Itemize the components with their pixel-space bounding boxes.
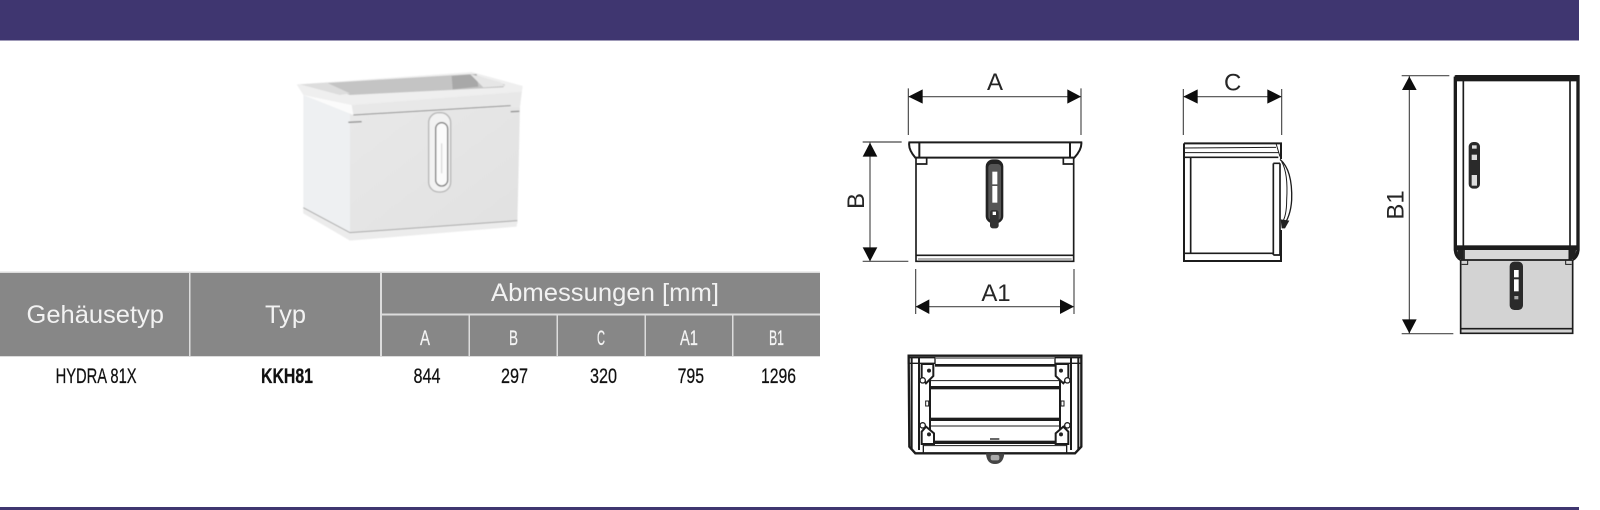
corners and posts — [908, 357, 1082, 453]
table row: HYDRA 81X values: 795 — [678, 365, 704, 388]
table row: HYDRA 81X values: 1296 — [761, 365, 796, 388]
drawing: front view with dimensions A and B — [843, 69, 1081, 261]
dimension A: A — [987, 69, 1003, 96]
product photo: enclosure — [297, 72, 523, 241]
enclosure side outline — [1184, 143, 1292, 261]
lower grey enclosure — [1461, 250, 1573, 333]
drawing: side view with dimension C — [1183, 70, 1292, 261]
drawing: open enclosure with dimension B1 — [1382, 75, 1579, 334]
dimension A1 — [916, 269, 1074, 314]
sub-headings: dimension letters: C — [597, 326, 605, 350]
table row: HYDRA 81X values: KKH81 — [261, 365, 313, 388]
sub-headings: dimension letters: A1 — [680, 326, 698, 350]
handle — [986, 159, 1003, 228]
dimension B1: B1 — [1382, 190, 1409, 220]
sub-headings: dimension letters — [420, 326, 784, 350]
handle nub — [986, 453, 1004, 464]
specification table — [0, 272, 820, 388]
footer bar — [0, 507, 1579, 510]
dimension C: C — [1224, 70, 1241, 97]
dimension B — [843, 142, 908, 261]
sub-headings: dimension letters: A — [420, 326, 430, 350]
dimension B: B — [843, 193, 870, 209]
dimension C — [1183, 70, 1282, 135]
rails — [930, 364, 1060, 444]
handle latch — [1281, 219, 1289, 228]
dimension A1: A1 — [981, 280, 1011, 307]
sub-headings: dimension letters: B — [509, 326, 518, 350]
table row: HYDRA 81X values — [56, 365, 796, 388]
table row: HYDRA 81X values: HYDRA 81X — [56, 365, 137, 388]
table row: HYDRA 81X values: 844 — [414, 365, 441, 388]
header bar — [0, 0, 1579, 40]
upper door — [1455, 75, 1579, 260]
column heading: Gehäusetyp: Gehäusetyp — [26, 301, 164, 329]
outer frame — [909, 356, 1081, 453]
dimension A — [908, 69, 1081, 135]
column heading: Abmessungen: Abmessungen [mm] — [491, 279, 719, 307]
column heading: Typ: Typ — [265, 301, 306, 329]
dimension B1 — [1382, 76, 1453, 334]
table row: HYDRA 81X values: 297 — [501, 365, 528, 388]
sub-headings: dimension letters: B1 — [769, 326, 784, 350]
drawing: top view — [908, 356, 1082, 464]
table row: HYDRA 81X values: 320 — [590, 365, 617, 388]
table header background — [0, 272, 820, 357]
enclosure front outline — [909, 142, 1081, 261]
